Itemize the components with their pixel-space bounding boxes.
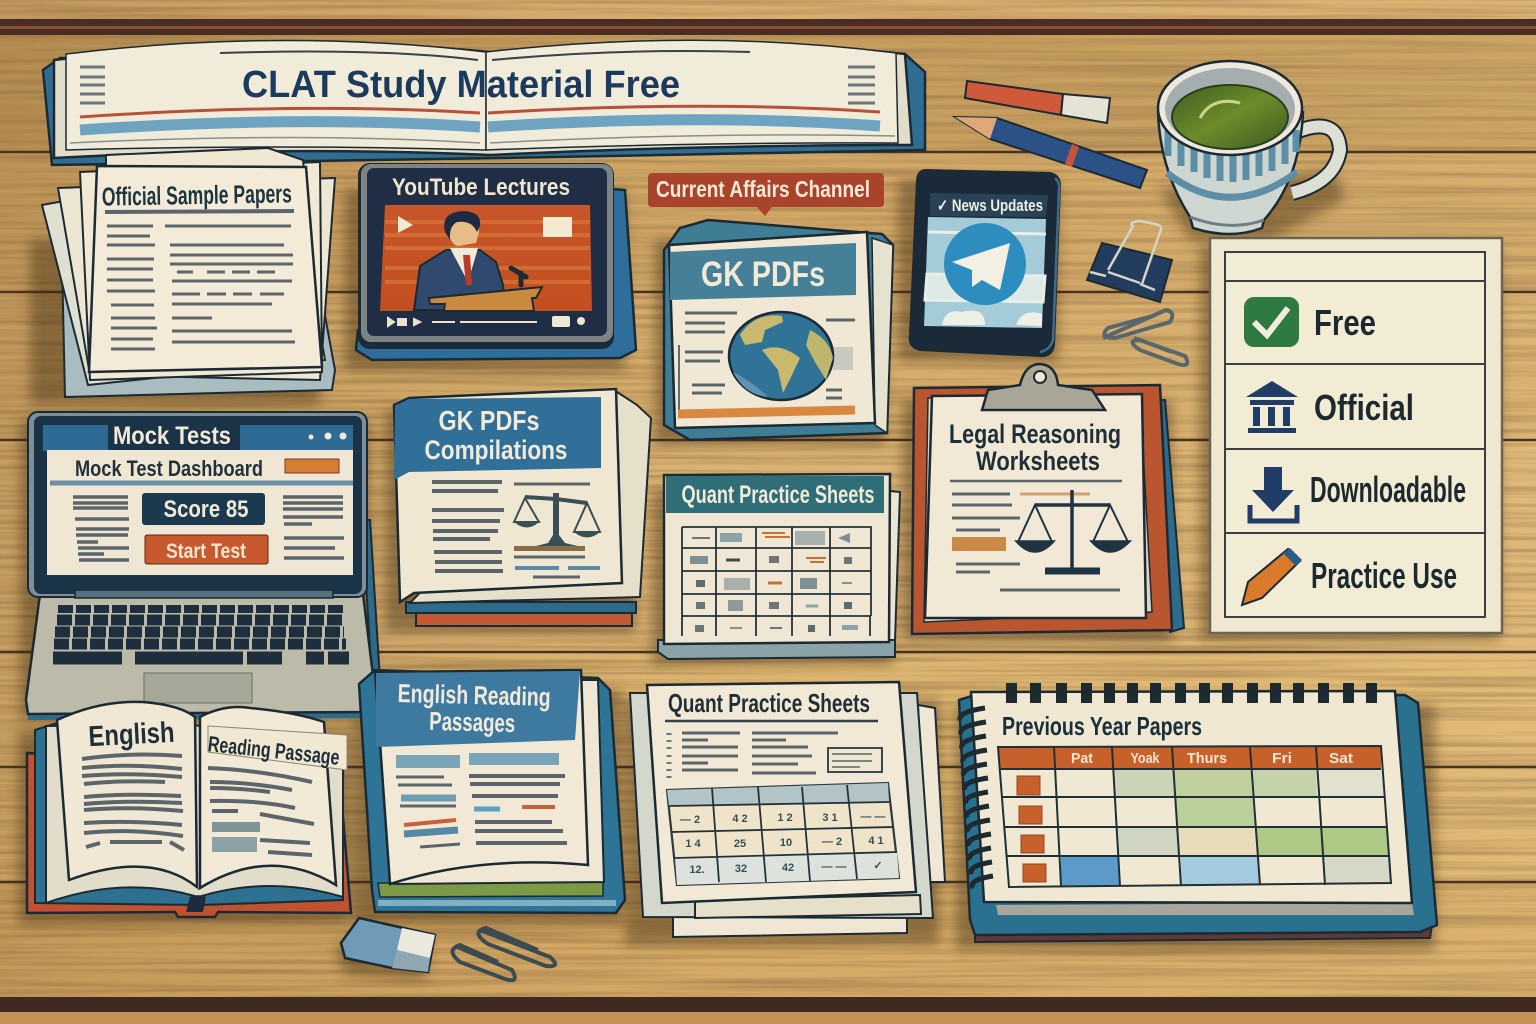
heading: Mock Tests [113, 422, 231, 450]
video frame [380, 205, 592, 311]
text lines [107, 226, 157, 349]
data table [667, 783, 899, 885]
data table: 10 [780, 837, 792, 849]
panel: English reading passages: Passages [429, 706, 516, 738]
icon: globe [729, 312, 833, 400]
stat: score: Score 85 [164, 496, 248, 523]
icon: scales [1018, 490, 1128, 571]
panel: legal reasoning worksheets clipboard [912, 364, 1184, 634]
icon: pencil [955, 117, 1147, 188]
icon: presenter [414, 211, 505, 310]
data table: — — [860, 811, 886, 823]
icon: highlighter [965, 81, 1110, 123]
data table: 42 [782, 862, 794, 874]
item: official [1246, 381, 1414, 433]
heading: GK PDFs [438, 405, 540, 436]
item: downloadable [1250, 467, 1466, 521]
drop shadows under objects [18, 170, 1500, 980]
icon: phone with news updates [910, 170, 1060, 356]
button: start test [145, 535, 268, 564]
icon: top spiral binding [1006, 683, 1377, 703]
heading: English Reading [397, 678, 551, 712]
column headers: Fri [1272, 750, 1292, 767]
panel: GK PDFs newspaper with globe [664, 220, 893, 440]
column headers: Thurs [1187, 750, 1227, 767]
panel: mock tests laptop: Mock Test Dashboard [75, 456, 263, 481]
icon: binder clip [1087, 221, 1172, 302]
panel: English reading passages [359, 670, 625, 913]
label: current affairs channel: Current Affairs Channel [656, 176, 870, 202]
panel: checklist [1210, 238, 1502, 633]
icon: eraser [341, 918, 435, 972]
panel: YouTube lectures tablet [356, 164, 636, 360]
title: CLAT Study Material Free [242, 64, 680, 106]
panel: quant practice sheets [658, 474, 900, 659]
panel: English open book [27, 702, 351, 917]
keyboard [53, 609, 349, 658]
heading: English [88, 717, 175, 753]
icon: paper clips [1103, 310, 1187, 365]
trackpad [144, 673, 252, 703]
heading: ✓ News Updates [937, 197, 1043, 215]
data table: — 2 [822, 836, 842, 848]
data table: 4 1 [868, 835, 884, 847]
data table: 1 2 [777, 812, 793, 824]
tag: reading passage [207, 726, 347, 770]
panel: GK PDFs compilations [394, 389, 651, 626]
data table: 25 [734, 838, 746, 850]
data table: ✓ [873, 860, 883, 872]
data table: — — [821, 861, 847, 873]
heading: Quant Practice Sheets [682, 481, 874, 509]
item: free: Free [1314, 302, 1376, 343]
row markers [1017, 776, 1046, 882]
data table: — 2 [680, 814, 700, 826]
item: free [1244, 297, 1376, 347]
panel: GK PDFs compilations: Compilations [424, 435, 568, 465]
icon: side spiral binding [960, 708, 993, 888]
panel: official sample papers [42, 148, 335, 397]
data table: 4 2 [732, 813, 748, 825]
data table: 1 4 [685, 838, 702, 850]
icon: tea cup [1158, 61, 1340, 234]
item: practice use [1242, 548, 1457, 605]
label: current affairs channel [648, 173, 884, 216]
title banner: open book [43, 40, 925, 165]
item: official: Official [1314, 387, 1414, 428]
column headers: Pat [1071, 750, 1093, 767]
heading: Quant Practice Sheets [668, 688, 870, 718]
button: start test: Start Test [166, 540, 246, 563]
column headers: Yoak [1130, 750, 1160, 767]
heading: YouTube Lectures [392, 174, 570, 201]
column headers [1071, 750, 1353, 767]
icon: clipboard clip [982, 364, 1105, 410]
tag: reading passage: Reading Passage [207, 731, 341, 770]
heading: Previous Year Papers [1002, 711, 1202, 741]
item: practice use: Practice Use [1311, 555, 1457, 596]
panel: legal reasoning worksheets clipboard: Worksheets [976, 446, 1100, 476]
data table: 12. [689, 864, 705, 876]
stat: score [142, 493, 265, 525]
panel: mock tests laptop [26, 412, 380, 720]
column headers: Sat [1329, 750, 1353, 767]
player controls [388, 318, 537, 326]
icon: scales [514, 493, 600, 550]
panel: quant practice sheets table [630, 682, 945, 937]
icon: paper clips bottom [452, 928, 555, 980]
panel: previous year papers notebook [959, 683, 1437, 942]
worksheet grid [682, 527, 871, 636]
data table: 3 1 [822, 812, 838, 824]
icon: lectern and mic [429, 268, 542, 311]
schedule table [998, 746, 1391, 887]
heading: GK PDFs [701, 255, 825, 294]
data table: 32 [735, 863, 747, 875]
heading: Official Sample Papers [102, 178, 292, 212]
heading: Legal Reasoning [949, 419, 1121, 449]
